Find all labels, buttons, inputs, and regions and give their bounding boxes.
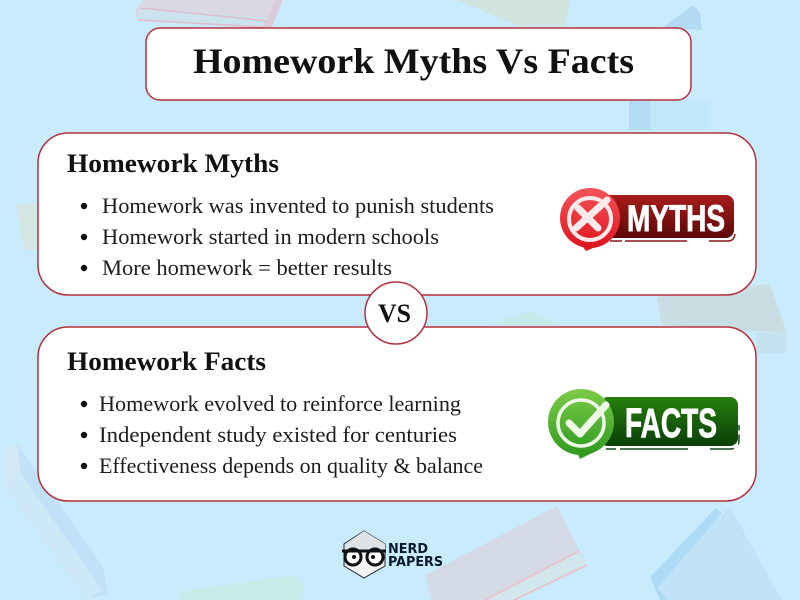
icon: check bubble (548, 389, 614, 459)
list: myths: Homework was invented to punish students (102, 193, 494, 218)
book: top centre (458, 0, 570, 26)
icon: hexagon face with glasses (342, 531, 386, 578)
book: faint centre (490, 311, 560, 325)
icon: cross bubble (560, 188, 620, 251)
book: top right (629, 5, 711, 130)
book: bottom right (650, 507, 782, 600)
book: bottom left (3, 443, 108, 600)
logo: Nerd Papers (342, 531, 443, 578)
book: right middle (657, 284, 787, 353)
panel: myths (38, 133, 756, 295)
vs badge (365, 282, 427, 344)
badge: facts: FACTS (625, 400, 717, 446)
list: facts: Independent study existed for centuries (99, 422, 457, 447)
book: left edge (16, 202, 38, 250)
badge: myths (560, 188, 735, 251)
book: top left (135, 0, 283, 27)
panel: facts (38, 327, 756, 501)
list: myths (81, 193, 494, 280)
book: bottom middle-right (425, 506, 587, 600)
list: myths: More homework = better results (102, 255, 392, 280)
list: facts: Homework evolved to reinforce learning (99, 391, 461, 416)
list: facts: Effectiveness depends on quality & balance (99, 453, 483, 478)
badge: myths: MYTHS (627, 198, 725, 239)
title panel (146, 28, 691, 100)
logo: Nerd Papers: PAPERS (388, 555, 443, 570)
heading: myths: Homework Myths (67, 149, 279, 178)
list: facts (81, 391, 483, 478)
book: bottom centre (178, 575, 304, 600)
badge: facts (548, 389, 739, 459)
logo text: NERD (388, 542, 428, 557)
list: myths: Homework started in modern schools (102, 224, 439, 249)
title: Homework Myths Vs Facts (193, 41, 634, 81)
vs badge: VS (378, 299, 411, 328)
heading: facts: Homework Facts (67, 347, 266, 376)
